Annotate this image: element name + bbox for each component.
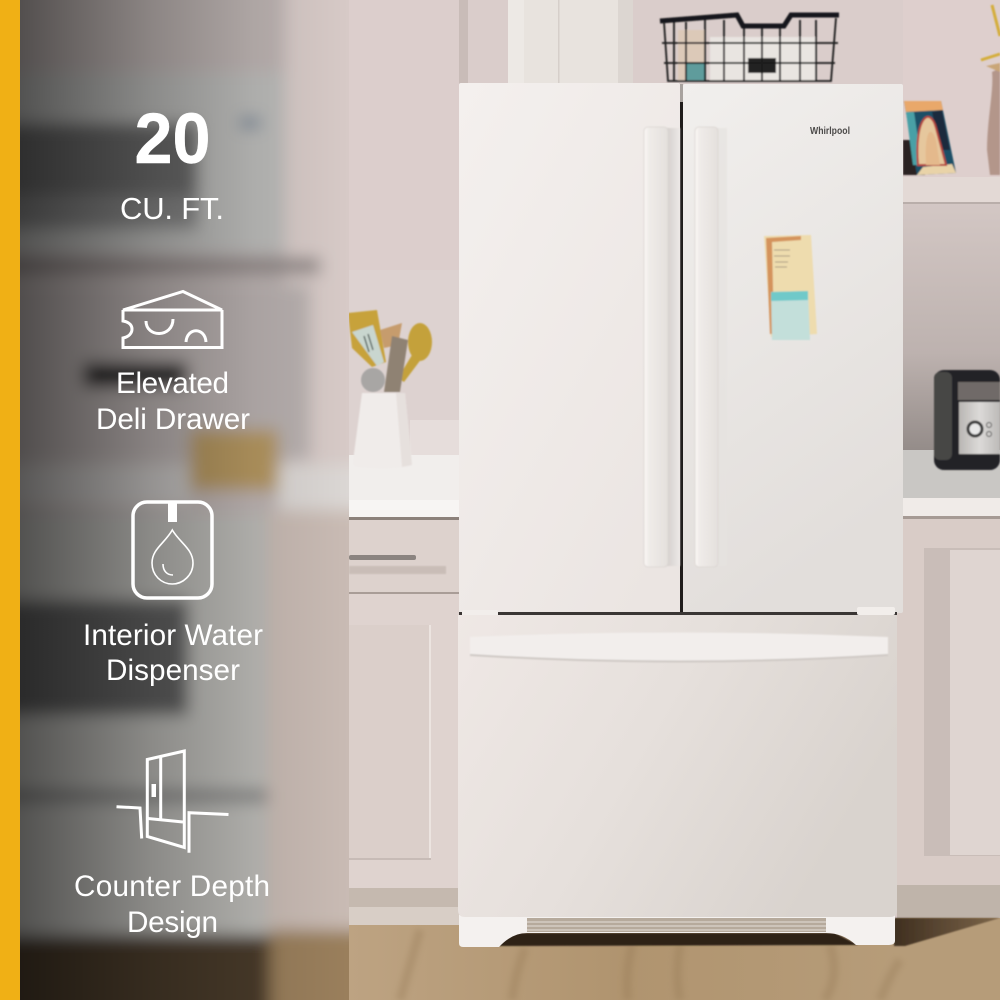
icon: cheese wedge: [123, 292, 222, 348]
utensil crock: [348, 310, 432, 468]
fridge shadow on floor right: [894, 918, 1000, 946]
counter and cabinets, right: [897, 450, 1000, 919]
vase with flowers: [981, 5, 1000, 175]
icon: fridge in counter: [116, 751, 228, 853]
label line 2: Deli Drawer: [96, 403, 250, 436]
drawer handle: [470, 632, 888, 662]
feature: elevated deli drawer: [96, 292, 250, 436]
freezer drawer: [458, 615, 897, 917]
microwave: [239, 85, 272, 238]
fridge feet and vent: [459, 915, 895, 947]
wall shelf with art and vase: [903, 5, 1000, 204]
feature: counter depth design: [74, 751, 270, 939]
blurred left panel background: [20, 0, 349, 1000]
left door: [459, 83, 680, 613]
door gap: [680, 84, 683, 614]
right handle: [695, 127, 727, 567]
capacity number: 20: [134, 100, 210, 179]
label: Elevated: [116, 367, 229, 400]
label line 2: Design: [127, 906, 218, 939]
floor: [349, 918, 1000, 1000]
capacity unit: CU. FT.: [120, 191, 224, 226]
magnetic note: [764, 235, 817, 340]
label: Counter Depth: [74, 870, 270, 903]
left handle: [644, 127, 680, 567]
right door: [683, 84, 903, 613]
label line 2: Dispenser: [106, 654, 240, 687]
art block: [903, 101, 956, 175]
feature: interior water dispenser: [83, 502, 263, 687]
icon: water drop dispenser: [133, 502, 212, 598]
yellow side bar: [0, 0, 20, 1000]
label: Interior Water: [83, 619, 263, 652]
oven: [276, 280, 314, 464]
feature: capacity: [120, 100, 224, 226]
counter and cabinets, centre: [349, 455, 459, 925]
whirlpool logo: Whirlpool: [810, 125, 850, 137]
toaster: [934, 370, 1000, 470]
lower oven: [0, 515, 268, 935]
paper towel roll: [508, 0, 633, 83]
refrigerator: [458, 83, 1000, 947]
fridge shadow under vent: [495, 933, 858, 946]
gap between doors and drawer: [459, 607, 897, 618]
wire basket: [660, 15, 839, 81]
